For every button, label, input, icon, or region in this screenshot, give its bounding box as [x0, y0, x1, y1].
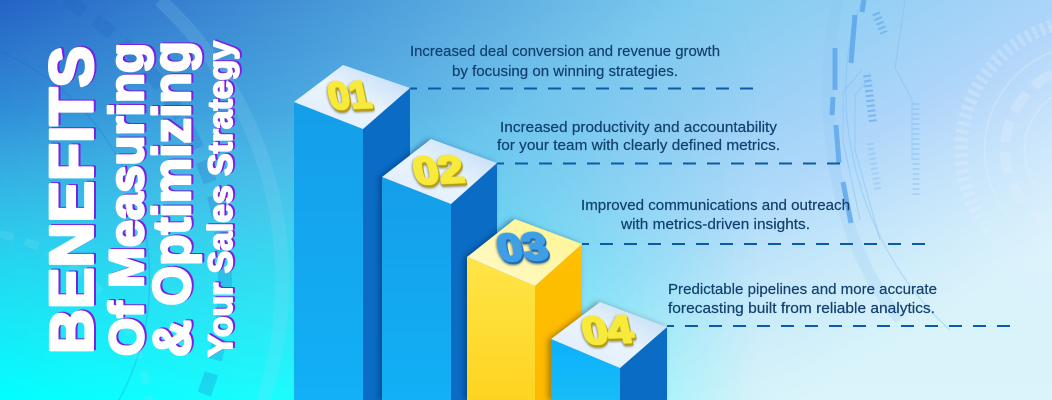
number 01: 01: [324, 73, 375, 117]
title: Benefits of Measuring & Optimizing Your Sales Strategy: [38, 41, 240, 357]
callout 2: Increased productivity and accountability: [500, 120, 778, 136]
callout 3: with metrics-driven insights.: [620, 217, 810, 233]
number 04: 04: [578, 308, 637, 352]
heading: Of Measuring: Of Measuring: [101, 43, 154, 356]
callout 1: by focusing on winning strategies.: [452, 64, 678, 80]
callout 1: Increased deal conversion and revenue growth: [410, 44, 720, 60]
number 03: 03: [493, 225, 552, 269]
heading: & Optimizing: & Optimizing: [143, 41, 202, 357]
callout 1: [410, 44, 755, 88]
callout 3: [581, 198, 925, 244]
bar 01: [294, 65, 410, 400]
callout 4: forecasting built from reliable analytics.: [668, 301, 935, 317]
callout 4: Predictable pipelines and more accurate: [668, 282, 937, 298]
heading: BENEFITS: BENEFITS: [38, 46, 106, 354]
callout 4: [667, 282, 1010, 326]
heading: Your Sales Strategy: Your Sales Strategy: [202, 41, 240, 357]
callout 2: for your team with clearly defined metrics.: [497, 138, 780, 154]
bar 02: [382, 139, 497, 400]
number 02: 02: [409, 148, 468, 192]
callout 3: Improved communications and outreach: [581, 198, 850, 214]
callout 2: [497, 120, 840, 164]
bar 04: [551, 302, 667, 400]
bar 03 highlighted: [467, 219, 582, 400]
